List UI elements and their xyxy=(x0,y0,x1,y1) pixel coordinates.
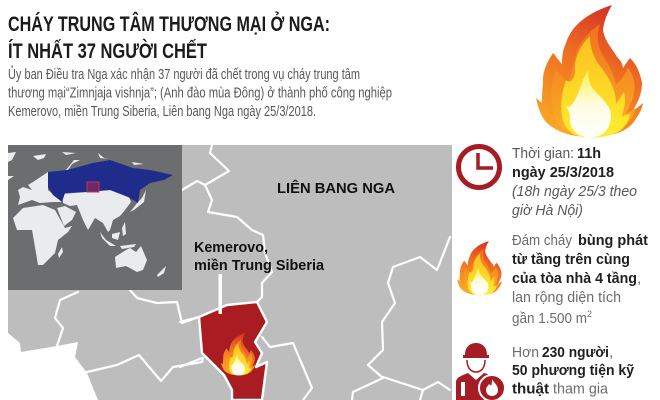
SE Asia islands xyxy=(100,222,136,249)
Africa xyxy=(13,205,72,265)
icon: flame on map xyxy=(221,333,255,375)
icon: clock xyxy=(458,146,500,188)
Russia highlighted xyxy=(48,160,173,203)
Kemerovo region xyxy=(199,302,267,400)
time text: 11h xyxy=(577,145,601,162)
fire text: lan rộng diện tích xyxy=(512,289,621,306)
Kemerovo marker xyxy=(87,182,99,192)
responders text: Hơn xyxy=(512,344,539,361)
intro text xyxy=(8,65,392,120)
info 2: fire spread xyxy=(457,232,648,327)
responders text: tham gia xyxy=(553,380,609,398)
time text: Thời gian: xyxy=(512,146,574,162)
fire text: gần 1.500 m xyxy=(512,310,587,327)
Australia xyxy=(115,246,147,272)
fire text: , xyxy=(637,270,641,287)
inset world map xyxy=(8,145,182,290)
icon: flame xyxy=(457,241,502,295)
map label: Kemerovo xyxy=(194,240,325,274)
intro text: thương mại“Zimnjaja vishnja”; (Anh đào mùa Đông) ở thành phố công nghiệp xyxy=(8,86,392,102)
info 3: responders xyxy=(456,343,635,400)
Japan xyxy=(130,190,146,212)
Arabia xyxy=(57,206,76,226)
Madagascar xyxy=(58,247,63,258)
info 1: time xyxy=(458,145,637,219)
fire text xyxy=(512,232,648,327)
fire text: 2 xyxy=(587,309,592,319)
intro text: Kemerovo, miền Trung Siberia, Liên bang Nga ngày 25/3/2018. xyxy=(8,104,316,120)
map label: Kemerovo: miền Trung Siberia xyxy=(194,258,325,274)
map: Russia regions xyxy=(8,145,452,400)
responders text: 50 phương tiện kỹ xyxy=(512,362,635,379)
intro text: Ủy ban Điều tra Nga xác nhận 37 người đã chết trong vụ cháy trung tâm xyxy=(8,65,360,83)
title: CHÁY TRUNG TÂM THƯƠNG MẠI Ở NGA: xyxy=(8,12,330,36)
icon: firefighter xyxy=(456,343,505,400)
responders text xyxy=(512,344,635,398)
fire text: từ tầng trên cùng xyxy=(512,251,630,268)
responders text: 230 người xyxy=(542,344,609,361)
fire text: Đám cháy xyxy=(512,232,572,249)
responders text: thuật xyxy=(512,380,549,398)
Arctic islands xyxy=(8,152,144,180)
time text: giờ Hà Nội) xyxy=(512,202,583,219)
Asia xyxy=(62,190,131,232)
icon: large flame xyxy=(536,5,643,137)
time text xyxy=(512,145,637,219)
title: ÍT NHẤT 37 NGƯỜI CHẾT xyxy=(8,39,207,63)
Europe xyxy=(18,172,62,205)
responders text: , xyxy=(609,344,613,361)
New Zealand xyxy=(157,266,166,277)
title xyxy=(8,12,330,63)
map label: Kemerovo: Kemerovo, xyxy=(194,240,268,256)
leader line xyxy=(218,274,222,314)
fire text: của tòa nhà 4 tầng xyxy=(512,270,637,287)
time text: ngày 25/3/2018 xyxy=(512,164,614,181)
time text: (18h ngày 25/3 theo xyxy=(512,183,637,200)
map label: Russia: LIÊN BANG NGA xyxy=(277,179,396,197)
fire text: bùng phát xyxy=(578,232,648,249)
